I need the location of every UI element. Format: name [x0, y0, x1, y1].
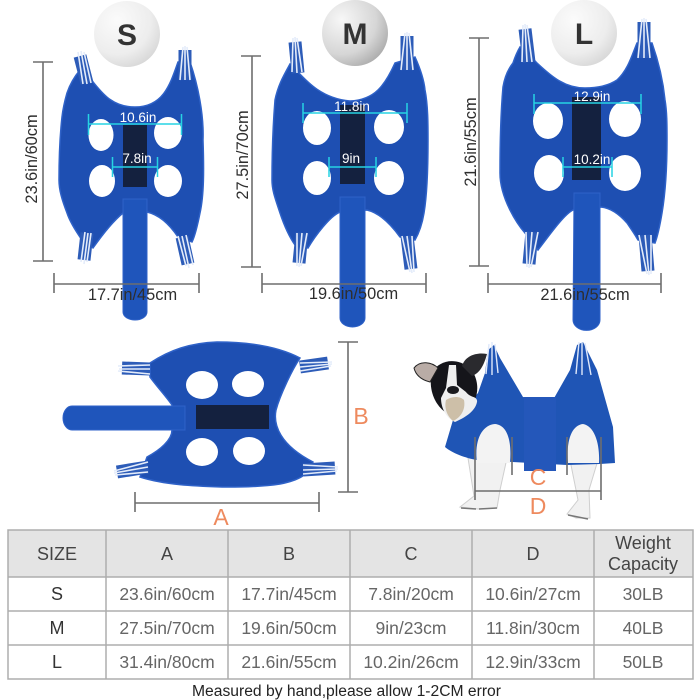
harness S flat view with measurements [23, 46, 204, 320]
dog left ear [414, 363, 438, 382]
harness L flat view with measurements: 21.6in/55cm [540, 286, 630, 304]
size table: 17.7in/45cm [241, 584, 337, 604]
harness side view with A and B dimensions [63, 342, 369, 530]
size table: C [404, 544, 418, 564]
size badge: L [551, 0, 617, 66]
harness M flat view with measurements: 9in [342, 151, 360, 166]
harness S flat view with measurements: 10.6in [120, 110, 156, 125]
size table: 12.9in/33cm [485, 652, 581, 672]
size table: 31.4in/80cm [119, 652, 215, 672]
size table: L [52, 652, 62, 672]
harness M flat view with measurements: 27.5in/70cm [234, 110, 252, 200]
harness belly strap [524, 397, 556, 471]
harness S flat view with measurements: 23.6in/60cm [23, 114, 41, 204]
dog legs [460, 458, 598, 518]
size table [8, 530, 693, 679]
size table: A [161, 544, 173, 564]
dog muzzle [445, 397, 464, 421]
harness L flat view with measurements: 12.9in [574, 89, 610, 104]
dog paws [461, 508, 588, 519]
size table: 30LB [623, 584, 663, 604]
dog harness [445, 342, 615, 465]
size badge: S [94, 1, 160, 67]
dog wearing the harness with C and D dimensions: C [530, 464, 546, 490]
harness L flat view with measurements: 10.2in [574, 152, 610, 167]
size table: 21.6in/55cm [241, 652, 337, 672]
size table: Weight [615, 533, 671, 553]
dog face white marking [441, 365, 477, 422]
size table: 40LB [623, 618, 663, 638]
harness M flat view with measurements [234, 32, 428, 327]
dog right ear [462, 354, 487, 376]
size table: D [526, 544, 540, 564]
size table: 11.8in/30cm [486, 618, 580, 638]
dog head [431, 361, 477, 412]
dog nose [447, 386, 459, 394]
dog haunches [476, 424, 599, 463]
size badge: M [322, 0, 388, 66]
size table: M [50, 618, 64, 638]
harness side view with A and B dimensions: B [353, 403, 369, 429]
harness strap stripes [486, 342, 591, 375]
harness L flat view with measurements [462, 18, 667, 330]
harness M flat view with measurements: 19.6in/50cm [309, 285, 398, 303]
table header row [8, 530, 693, 577]
size table: 27.5in/70cm [119, 618, 215, 638]
dog wearing the harness with C and D dimensions [414, 342, 615, 519]
harness S flat view with measurements: 17.7in/45cm [88, 286, 177, 304]
size table: 23.6in/60cm [119, 584, 215, 604]
dog wearing the harness with C and D dimensions: D [530, 493, 546, 519]
size table: Capacity [608, 554, 678, 574]
harness L flat view with measurements: 21.6in/55cm [462, 97, 480, 187]
size table: B [283, 544, 295, 564]
size table: 10.6in/27cm [485, 584, 581, 604]
size badge: S: S [117, 19, 137, 52]
size table: 9in/23cm [375, 618, 447, 638]
size table: 50LB [623, 652, 663, 672]
size table: SIZE [37, 544, 77, 564]
size table: 10.2in/26cm [363, 652, 459, 672]
size table: 7.8in/20cm [368, 584, 454, 604]
harness S flat view with measurements: 7.8in [122, 151, 152, 166]
size table: 19.6in/50cm [241, 618, 337, 638]
size badge: L: L [575, 18, 593, 51]
harness side view with A and B dimensions: A [213, 504, 229, 530]
size table: S [51, 584, 63, 604]
footnote: Measured by hand,please allow 1-2CM error [192, 683, 501, 700]
size badge: M: M [342, 18, 368, 51]
harness M flat view with measurements: 11.8in [334, 99, 370, 114]
